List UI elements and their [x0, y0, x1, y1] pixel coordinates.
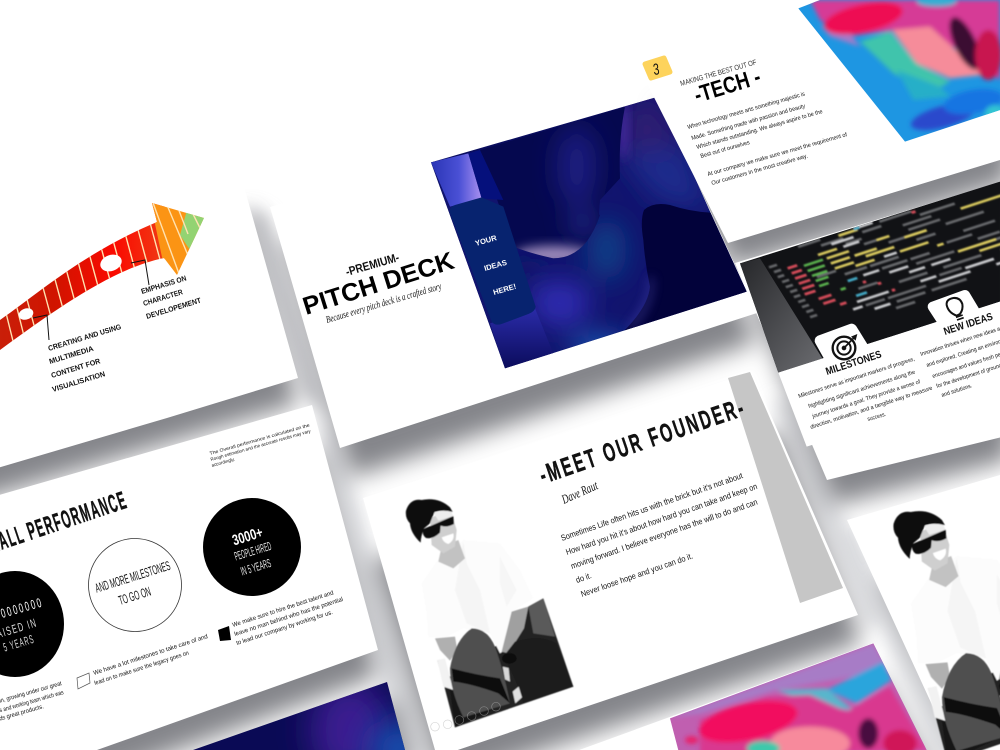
- card text: IDEAS: [483, 258, 508, 273]
- icon: light bulb: [947, 298, 964, 320]
- callout: emphasis on character development: EMPHASIS ON: [140, 274, 188, 296]
- tab: milestones: [820, 329, 863, 357]
- text: tech description: At our company we make sure we meet the requirement of: [707, 132, 848, 178]
- panel: overall performance slide: [0, 405, 378, 750]
- callout: emphasis on character development: [131, 260, 203, 321]
- stat circle: more milestones: [88, 538, 182, 632]
- text: founder quote: Sometimes Life often hits us with the brick but it's not about: [559, 470, 745, 543]
- panel: right founder copy slide: [847, 472, 1000, 750]
- image: abstract blue waves: [431, 98, 747, 368]
- soft colour washes: [528, 98, 706, 350]
- dark lower right blob: [623, 204, 757, 332]
- tab: new ideas: [933, 295, 976, 324]
- panel: tech slide: [633, 0, 1000, 243]
- text: tech description: [687, 92, 848, 187]
- stat circle: people hired: PEOPLE HIRED: [233, 539, 273, 563]
- lavender band: [431, 153, 482, 207]
- text: tech description: Best out of ourselves: [700, 140, 751, 160]
- upper lobe: [480, 106, 625, 258]
- text: founder quote: do it.: [574, 570, 593, 585]
- panel: pitch deck title slide: [270, 90, 757, 448]
- note: performance estimate: The Overall performance is calculated on the: [209, 422, 311, 456]
- callout: emphasis on character development: DEVELOPEMENT: [145, 296, 203, 321]
- text: founder quote: [559, 470, 759, 599]
- text: milestones description: success.: [867, 412, 887, 423]
- chart: rising striped arrow: [0, 203, 204, 350]
- stat circle: money raised: 5 YEARS: [1, 632, 36, 655]
- text: tech description: Which stands outstanding. We always aspire to be the: [696, 109, 824, 151]
- legend: milestones note: [77, 633, 209, 689]
- icon: target: [833, 334, 857, 359]
- card text: [474, 233, 517, 297]
- callout: creating and using multimedia: VISUALISATION: [51, 369, 106, 394]
- decorative grey column: [728, 372, 843, 603]
- panel: founder slide: [363, 372, 858, 750]
- heading: pitch deck: PITCH DECK: [299, 247, 458, 321]
- heading: tech: -TECH -: [691, 63, 763, 108]
- legend: growth note: [0, 680, 65, 726]
- heading: meet our founder: -MEET OUR FOUNDER-: [535, 392, 749, 490]
- heading: premium: -PREMIUM-: [344, 250, 401, 279]
- text: milestones description: [798, 356, 933, 431]
- image: painting: [797, 0, 1000, 143]
- note: performance estimate: accordingly.: [211, 457, 235, 468]
- legend: milestones note: We have a lot milestones to take care of and: [92, 633, 209, 677]
- text: founder quote: moving forward. I believe everyone has the will to do and can: [569, 497, 759, 571]
- panel: code milestones slide: [735, 168, 1000, 480]
- callout: creating and using multimedia: CONTENT FOR: [50, 356, 102, 380]
- legend: hiring note: [218, 589, 344, 647]
- text: new ideas description: [920, 325, 1000, 399]
- subheading: making the best out of: MAKING THE BEST OUT OF: [679, 57, 758, 88]
- text: milestones description: Milestones serve as important markers of progress,: [798, 356, 916, 400]
- callout: creating and using multimedia: MULTIMEDIA: [48, 344, 95, 366]
- name: dave raut: Dave Raut: [558, 477, 600, 507]
- soft side shadows in the gaps between slides: [248, 205, 966, 750]
- stat circle: people hired: [203, 498, 301, 596]
- legend: hiring note: We make sure to hire the best talent and: [231, 589, 335, 629]
- text: new ideas description: and solutions.: [941, 383, 973, 399]
- image: painting: [663, 640, 933, 750]
- badge: number 3: [645, 58, 670, 79]
- text: tech description: Made. Something made with passion and beauty: [691, 104, 806, 142]
- callout: creating and using multimedia: [33, 315, 122, 394]
- callout: creating and using multimedia: CREATING AND USING: [47, 322, 122, 353]
- panel: lower painting slide: [580, 644, 927, 750]
- stat circle: people hired: 3000+: [230, 524, 265, 549]
- note: performance estimate: Rough estimation and the accurate results may vary: [210, 428, 312, 462]
- panel: lower left blue slide: [193, 682, 405, 750]
- image: founder portrait: [406, 499, 573, 727]
- text: tech description: Our customers in the most creative way.: [711, 153, 809, 187]
- heading: milestones: MILESTONES: [824, 349, 883, 378]
- text: milestones description: direction, motivation, and a tangible way to measure: [810, 386, 933, 431]
- card text: YOUR: [474, 233, 498, 248]
- tagline: Because every pitch deck is a crafted story: [325, 281, 443, 326]
- text: milestones description: highlighting significant achievements along the: [808, 370, 916, 410]
- icons: slide controls: [431, 702, 500, 731]
- text: founder quote: Never loose hope and you can do it.: [579, 551, 694, 599]
- text: milestones description: journey towards a goal. They provide a sense of: [811, 379, 921, 420]
- legend: hiring note: leave no man behind who has the potential: [233, 596, 344, 638]
- card: [450, 197, 536, 325]
- image: founder portrait copy: [893, 511, 1000, 750]
- card text: HERE!: [492, 282, 517, 297]
- legend: milestones note: lead on to make sure the legacy goes on: [93, 650, 190, 687]
- stat circle: more milestones: AND MORE MILESTONES: [93, 558, 172, 596]
- legend: hiring note: to lead our company by working for us.: [235, 609, 334, 647]
- text: founder quote: How hard you hit it's about how hard you can take and keep on: [564, 481, 759, 557]
- text: tech description: When technology meets arts something majestic is: [687, 92, 806, 131]
- stat circle: money raised: [0, 571, 64, 677]
- lower band: [490, 308, 553, 368]
- panel: arrow timeline slide: [0, 200, 298, 468]
- badge: number 3: 3: [652, 61, 661, 79]
- image: code screen: [740, 182, 1000, 372]
- stat circle: people hired: IN 5 YEARS: [239, 556, 273, 578]
- stat circle: more milestones: TO GO ON: [117, 584, 153, 608]
- callout: emphasis on character development: CHARACTER: [142, 287, 184, 308]
